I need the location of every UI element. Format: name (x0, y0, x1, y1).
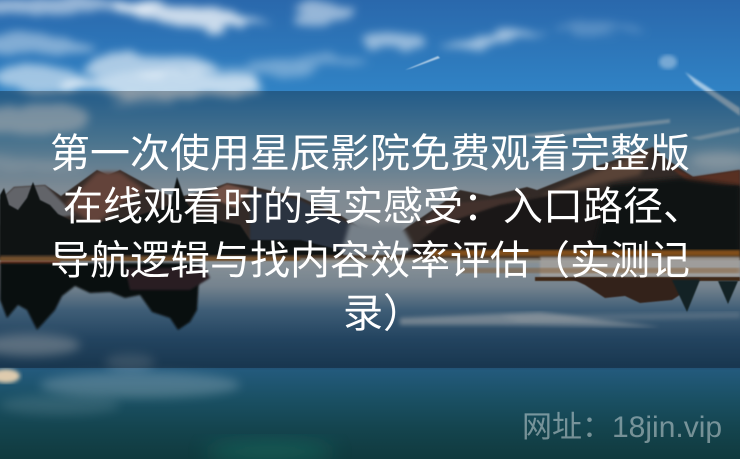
shoreline (0, 250, 740, 281)
clouds (0, 0, 645, 175)
title: 第一次使用星辰影院免费观看完整版 (50, 132, 690, 176)
green shallows (205, 444, 335, 459)
watermark: 网址：18jin.vip (522, 411, 722, 444)
cloud reflections on water (0, 312, 740, 415)
title (50, 132, 703, 336)
title: 导航逻辑与找内容效率评估（实测记 (50, 239, 690, 283)
title: 在线观看时的真实感受：入口路径、 (63, 185, 703, 229)
contrails (405, 55, 740, 168)
mountain and tree reflections (0, 263, 738, 330)
mountains (0, 147, 740, 260)
translucent dark title band (0, 91, 740, 368)
title: 录） (343, 292, 423, 336)
forest on left shore (0, 177, 345, 258)
